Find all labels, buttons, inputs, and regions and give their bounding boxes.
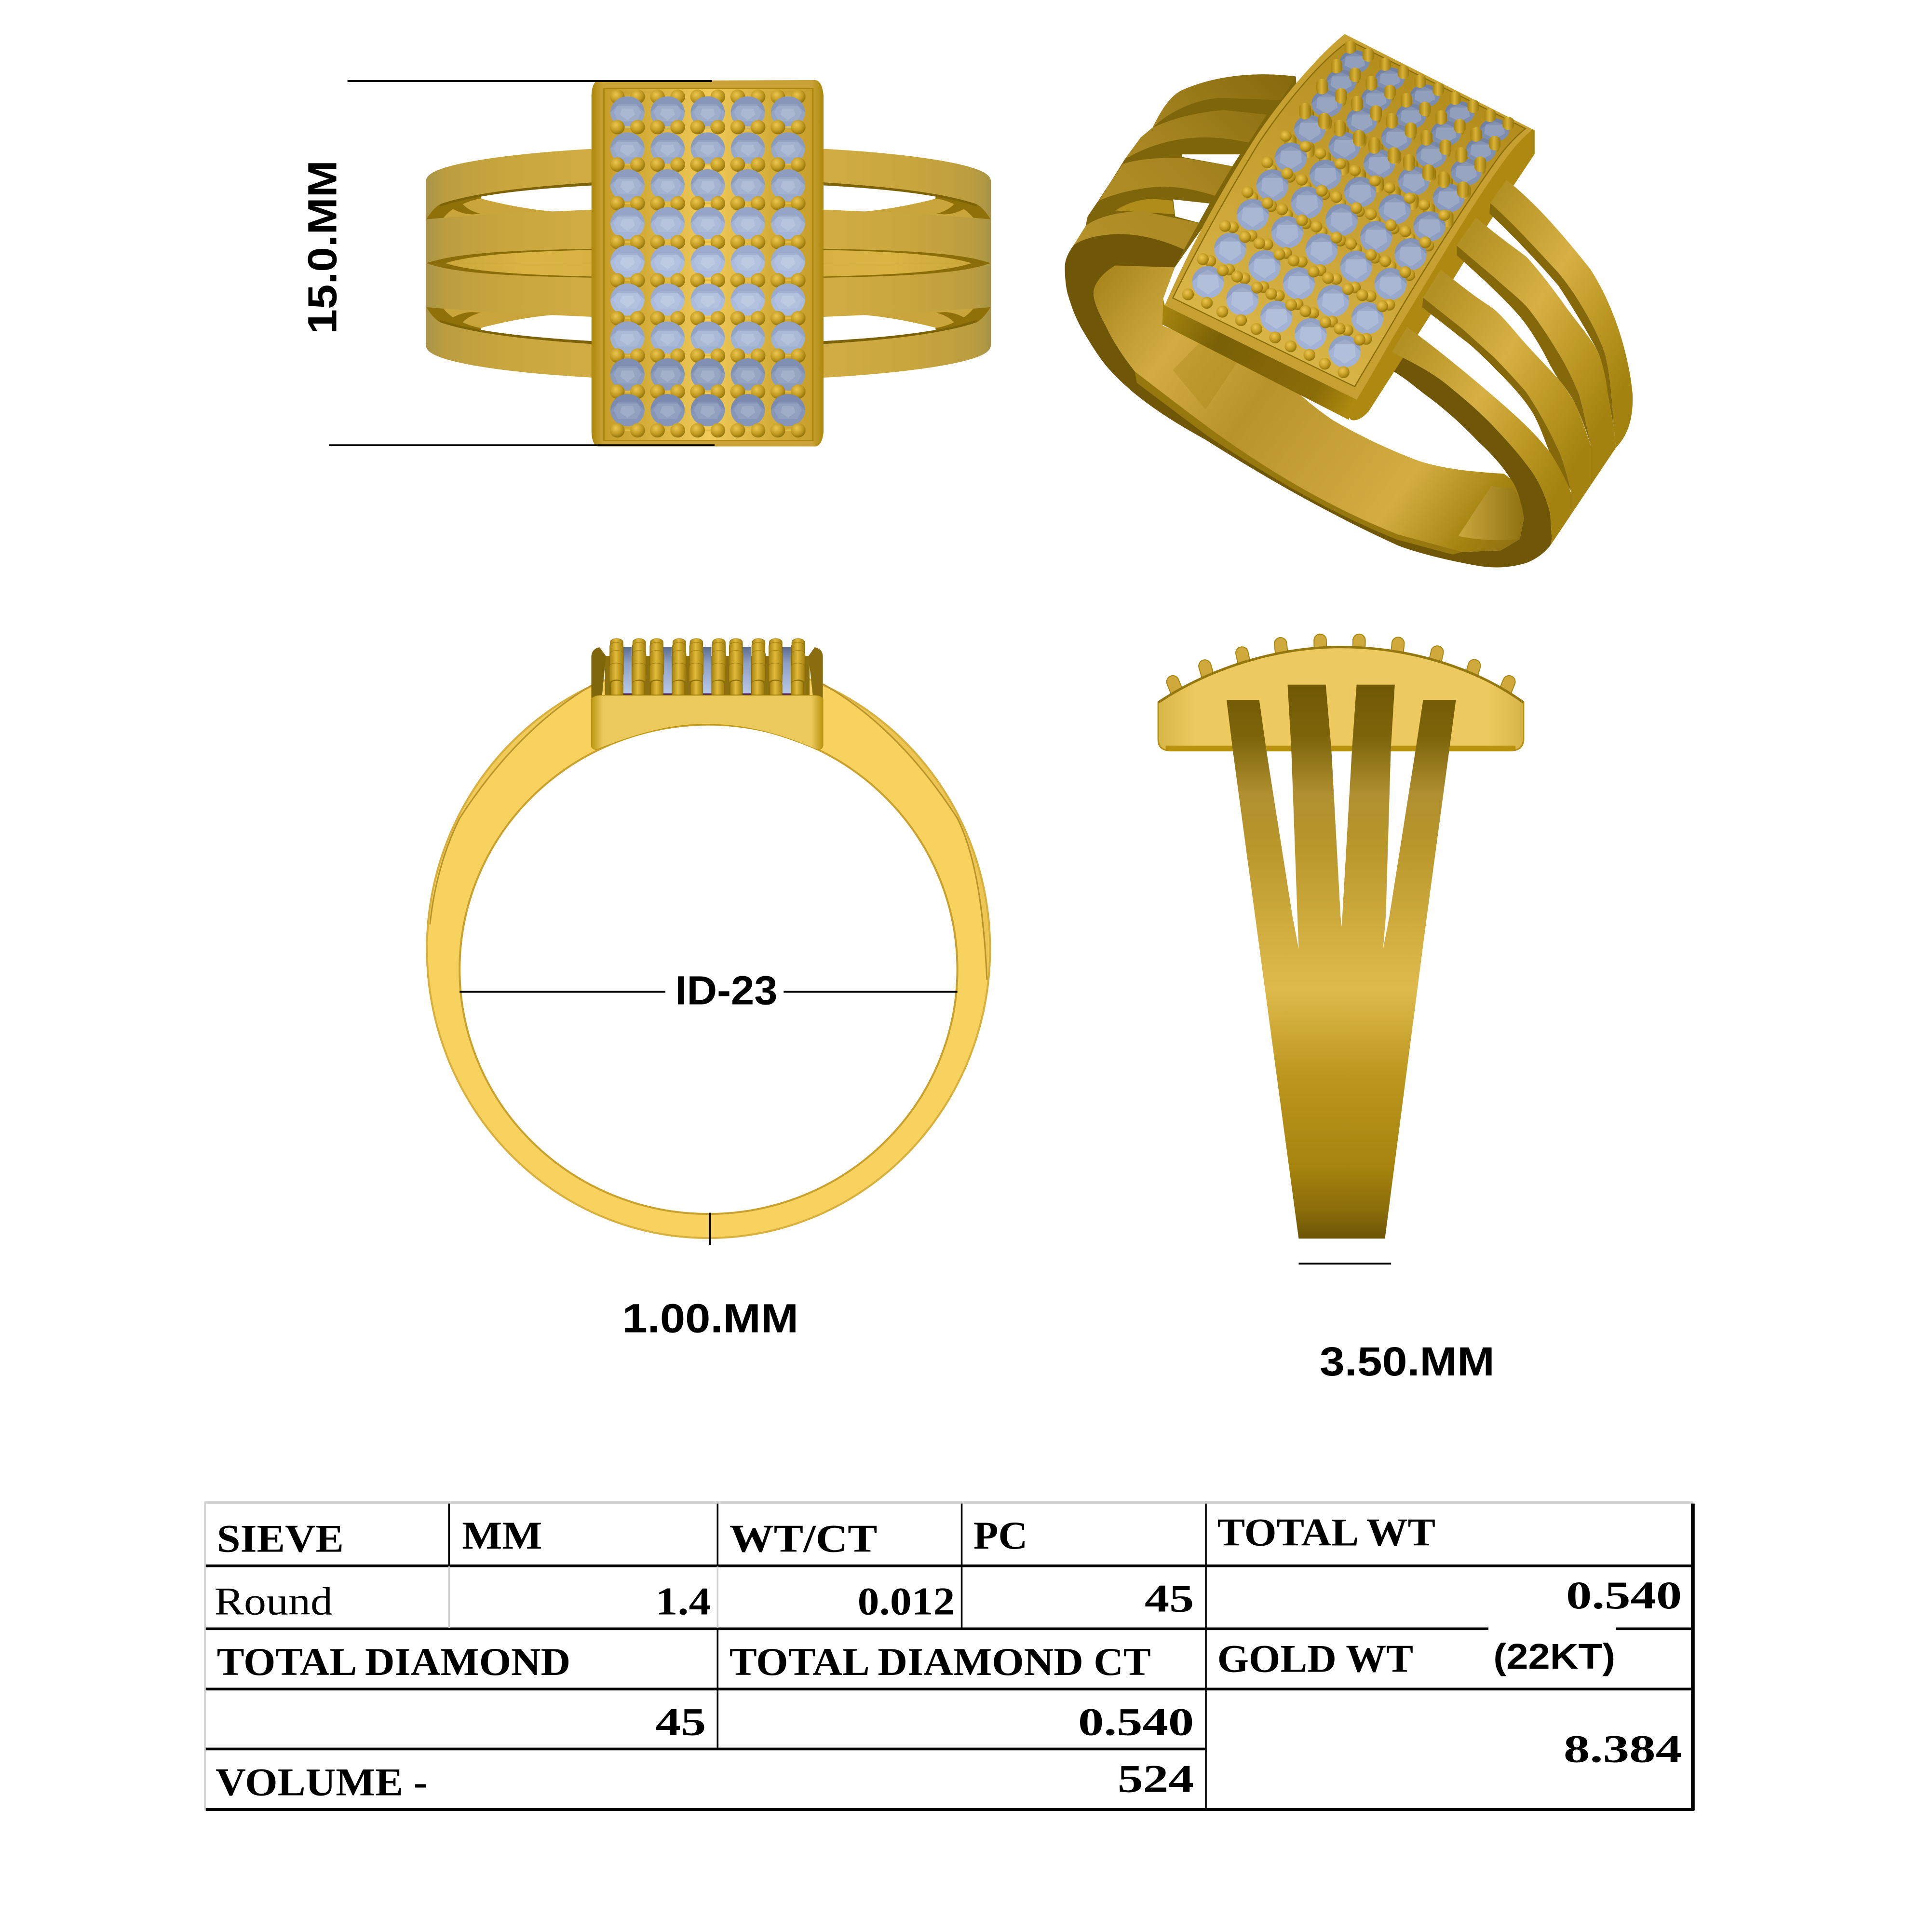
right wedge <box>809 647 823 698</box>
ring body <box>1065 34 1633 567</box>
right strip 4 face <box>1392 327 1571 545</box>
table text: 45 <box>1145 1577 1194 1620</box>
panel: perspective ring <box>1065 34 1633 567</box>
head bar <box>591 695 823 750</box>
label: 15.0.MM: 15.0.MM <box>300 160 345 334</box>
ring circle <box>426 659 991 1238</box>
inner edge shading <box>459 725 958 1214</box>
table text: Round <box>215 1579 333 1623</box>
right strip 1 face <box>1490 180 1633 448</box>
dimension line top <box>348 80 712 82</box>
back interior piece <box>1115 199 1175 214</box>
outer edge shading <box>427 660 990 1238</box>
table text: 524 <box>1118 1757 1194 1801</box>
back white gap upper <box>1182 154 1240 166</box>
shank inner surface <box>1094 266 1524 552</box>
plate face <box>1165 34 1533 399</box>
table text: 0.540 <box>1566 1573 1682 1617</box>
table text: (22KT) <box>1493 1636 1615 1676</box>
plate recess <box>1173 41 1526 387</box>
side shank with strips <box>1227 685 1456 1238</box>
panel: front view ring <box>426 639 991 1341</box>
table text <box>215 1510 1682 1804</box>
head bed <box>605 656 810 696</box>
panel: top view ring <box>300 80 991 447</box>
back strip C <box>1099 158 1232 201</box>
table text: 0.012 <box>858 1579 955 1623</box>
panel: side view ring <box>1158 634 1524 1384</box>
dimension line bottom <box>329 444 715 446</box>
left wedge <box>591 647 606 698</box>
table text: TOTAL WT <box>1217 1510 1435 1554</box>
right strip 2 dark side <box>1457 245 1591 447</box>
thickness tick <box>709 1213 711 1245</box>
specification table <box>204 1501 1695 1811</box>
table text: SIEVE <box>217 1516 344 1560</box>
back strip A <box>1152 74 1296 128</box>
side head <box>1158 647 1524 750</box>
label: ID-23: ID-23 <box>675 968 778 1013</box>
right strip 1 dark side <box>1489 203 1614 427</box>
table text: MM <box>462 1513 542 1557</box>
table text: WT/CT <box>730 1516 878 1560</box>
head block <box>591 639 823 750</box>
back white gap lower <box>1173 200 1210 223</box>
right outer side band <box>823 684 989 980</box>
lower right bands <box>805 263 991 379</box>
plate outer <box>592 80 824 447</box>
right strip 3 face <box>1423 270 1591 515</box>
side head top edge <box>1158 647 1524 703</box>
side head bottom lip <box>1165 746 1515 750</box>
table text: 8.384 <box>1564 1727 1682 1770</box>
label: 1.00.MM: 1.00.MM <box>622 1295 798 1341</box>
faint inner panel left <box>1173 337 1238 409</box>
width dimension line <box>1298 1263 1391 1265</box>
lower rim highlight band <box>1135 371 1462 555</box>
table text: 0.540 <box>1078 1700 1194 1743</box>
table text: 45 <box>656 1700 706 1743</box>
side prongs <box>1165 634 1517 699</box>
upper left bands <box>426 148 612 263</box>
prong columns <box>609 639 805 695</box>
plate inner recess <box>604 89 813 440</box>
back strip B <box>1125 110 1267 159</box>
table text: TOTAL DIAMOND CT <box>730 1640 1151 1684</box>
left side ridge <box>430 684 594 925</box>
label: 3.50.MM: 3.50.MM <box>1320 1339 1495 1384</box>
rim dark silhouette <box>1065 234 1552 567</box>
table text: VOLUME - <box>216 1760 428 1804</box>
ID dimension line right <box>784 991 958 993</box>
left outer side band <box>430 684 594 925</box>
ID dimension line left <box>459 991 665 993</box>
prong rows and stones <box>610 89 806 437</box>
table text: GOLD WT <box>1217 1637 1413 1681</box>
right strip 2 face <box>1457 218 1616 485</box>
upper right bands <box>805 148 991 263</box>
table text: TOTAL DIAMOND <box>217 1640 570 1684</box>
lower left bands <box>426 263 612 379</box>
table text: 1.4 <box>656 1579 711 1623</box>
plate side right <box>1349 129 1535 420</box>
back strip D <box>1074 211 1199 250</box>
plate side lower left <box>1162 299 1357 420</box>
right side ridge <box>823 684 987 980</box>
table text: PC <box>973 1513 1027 1557</box>
inner notch right <box>1458 486 1523 540</box>
right strip 3 dark side <box>1422 298 1571 491</box>
top view bands and plate <box>426 80 991 447</box>
table grid <box>204 1501 1695 1811</box>
stones and prongs <box>1182 41 1514 378</box>
back left block <box>1065 74 1297 267</box>
